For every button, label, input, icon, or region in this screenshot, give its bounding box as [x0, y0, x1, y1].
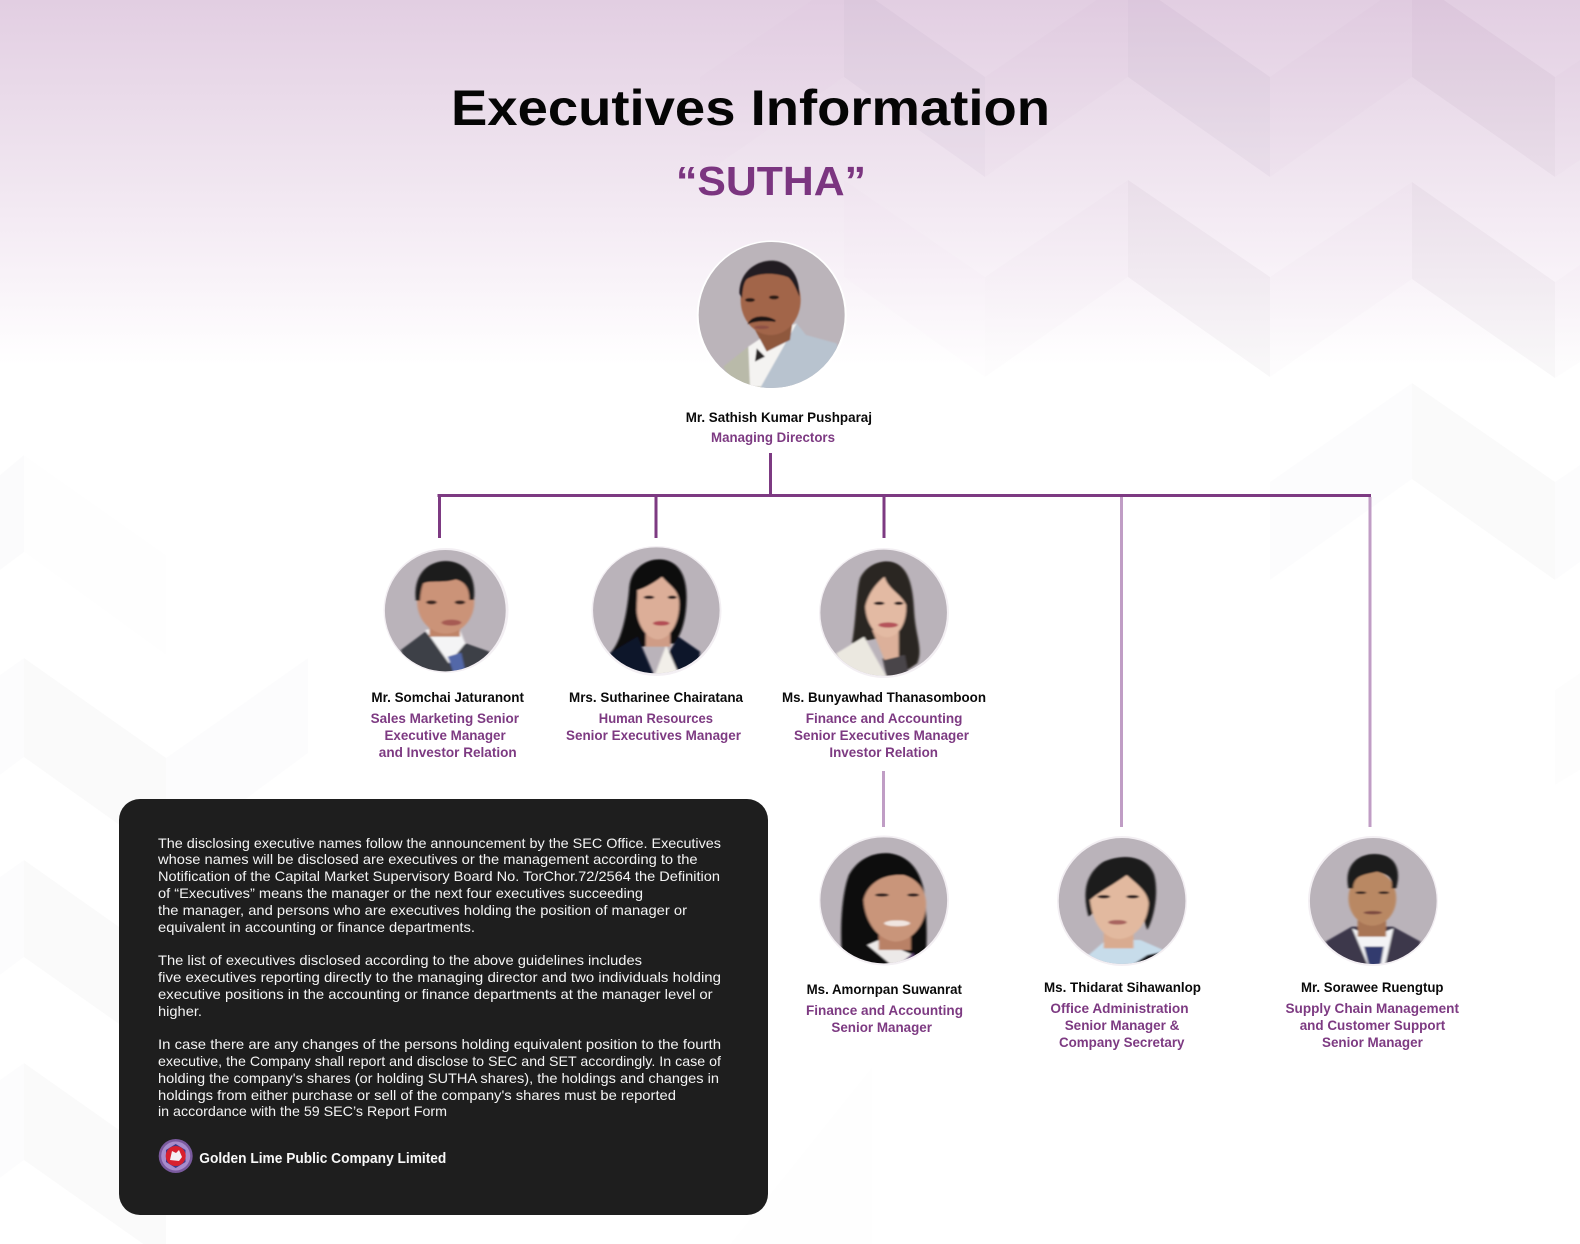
- role: Investor Relation: [829, 744, 938, 760]
- paragraph: list of executives: higher.: [158, 1003, 202, 1019]
- title: Executives Information: [451, 80, 1050, 136]
- role: [566, 710, 742, 743]
- role: and Customer Support: [1300, 1017, 1446, 1033]
- paragraph: disclosure basis: of “Executives” means the manager or the next four executives succeeding: [158, 885, 643, 901]
- portrait: [697, 240, 847, 390]
- portrait: [819, 548, 949, 678]
- role: [371, 710, 520, 760]
- executive: Mr. Sorawee Ruengtup: [1286, 833, 1459, 1050]
- executive: Ms. Thidarat Sihawanlop: [1044, 833, 1201, 1050]
- role: Senior Manager: [1322, 1034, 1423, 1050]
- name: Ms. Amornpan Suwanrat: [807, 981, 962, 997]
- role: Company Secretary: [1059, 1034, 1185, 1050]
- paragraph: changes: holdings from either purchase or sell of the company's shares must be reported: [158, 1087, 676, 1103]
- paragraph: changes: In case there are any changes of the persons holding equivalent position to the fourth: [158, 1036, 721, 1052]
- role: and Investor Relation: [379, 744, 517, 760]
- role: [794, 710, 970, 760]
- portrait: [1057, 836, 1187, 966]
- paragraph: disclosure basis: Notification of the Capital Market Supervisory Board No. TorChor.72/2564 the Definition: [158, 868, 720, 884]
- paragraph: disclosure basis: equivalent in accounting or finance departments.: [158, 919, 475, 935]
- name: Ms. Thidarat Sihawanlop: [1044, 979, 1201, 995]
- paragraph: disclosure basis: The disclosing executive names follow the announcement by the SEC Office. Executives: [158, 835, 721, 851]
- subtitle: SUTHA: “SUTHA”: [676, 158, 866, 204]
- paragraph: list of executives: executive positions in the accounting or finance departments at the manager level or: [158, 986, 713, 1002]
- role: [1286, 1000, 1459, 1050]
- executive: Mr. Sathish Kumar Pushparaj: [686, 240, 872, 445]
- role: Senior Executives Manager: [566, 727, 742, 743]
- portrait: [819, 836, 949, 966]
- paragraph: changes: [158, 1036, 721, 1119]
- role: Supply Chain Management: [1286, 1000, 1459, 1016]
- page background gradient: [0, 0, 1580, 365]
- portrait: [1308, 836, 1438, 966]
- role: Managing Directors: [711, 429, 835, 445]
- paragraph: changes: holding the company's shares (or holding SUTHA shares), the holdings and changes in: [158, 1070, 719, 1086]
- icon: company logo: [159, 1139, 193, 1173]
- panel: disclosure note: [119, 799, 768, 1215]
- executive: Ms. Bunyawhad Thanasomboon: [782, 543, 986, 760]
- role: Senior Manager &: [1065, 1017, 1179, 1033]
- role: [1050, 1000, 1189, 1050]
- role: Senior Executives Manager: [794, 727, 970, 743]
- name: Mr. Sathish Kumar Pushparaj: [686, 409, 872, 425]
- executive: Mr. Somchai Jaturanont: [371, 543, 524, 760]
- role: Finance and Accounting: [806, 710, 962, 726]
- paragraph: list of executives: five executives reporting directly to the managing director and two individuals holding: [158, 969, 721, 985]
- portrait: [384, 548, 508, 673]
- paragraph: disclosure basis: the manager, and persons who are executives holding the position of manager or: [158, 902, 687, 918]
- role: Finance and Accounting: [806, 1002, 963, 1018]
- paragraph: list of executives: The list of executives disclosed according to the above guidelines includes: [158, 952, 642, 968]
- role: Sales Marketing Senior: [371, 710, 520, 726]
- name: Mr. Sorawee Ruengtup: [1301, 979, 1444, 995]
- portrait: [592, 546, 722, 676]
- executive: Mrs. Sutharinee Chairatana: [566, 543, 743, 743]
- paragraph: disclosure basis: whose names will be disclosed are executives or the management according to the: [157, 851, 698, 867]
- role: Human Resources: [599, 710, 713, 726]
- role: Office Administration: [1050, 1000, 1189, 1016]
- executive: Ms. Amornpan Suwanrat: [806, 833, 963, 1035]
- paragraph: disclosure basis: [157, 835, 721, 935]
- paragraph: changes: in accordance with the 59 SEC’s Report Form: [158, 1103, 447, 1119]
- paragraph: list of executives: [158, 952, 721, 1019]
- role: [806, 1002, 963, 1035]
- org chart connectors: [438, 453, 1371, 827]
- role: Senior Manager: [831, 1019, 933, 1035]
- name: Ms. Bunyawhad Thanasomboon: [782, 689, 986, 705]
- name: Mr. Somchai Jaturanont: [371, 689, 524, 705]
- name: Mrs. Sutharinee Chairatana: [569, 689, 743, 705]
- paragraph: changes: executive, the Company shall report and disclose to SEC and SET accordingly. In case of: [158, 1053, 721, 1069]
- role: Executive Manager: [384, 727, 506, 743]
- company name: Golden Lime Public Company Limited: [199, 1151, 446, 1167]
